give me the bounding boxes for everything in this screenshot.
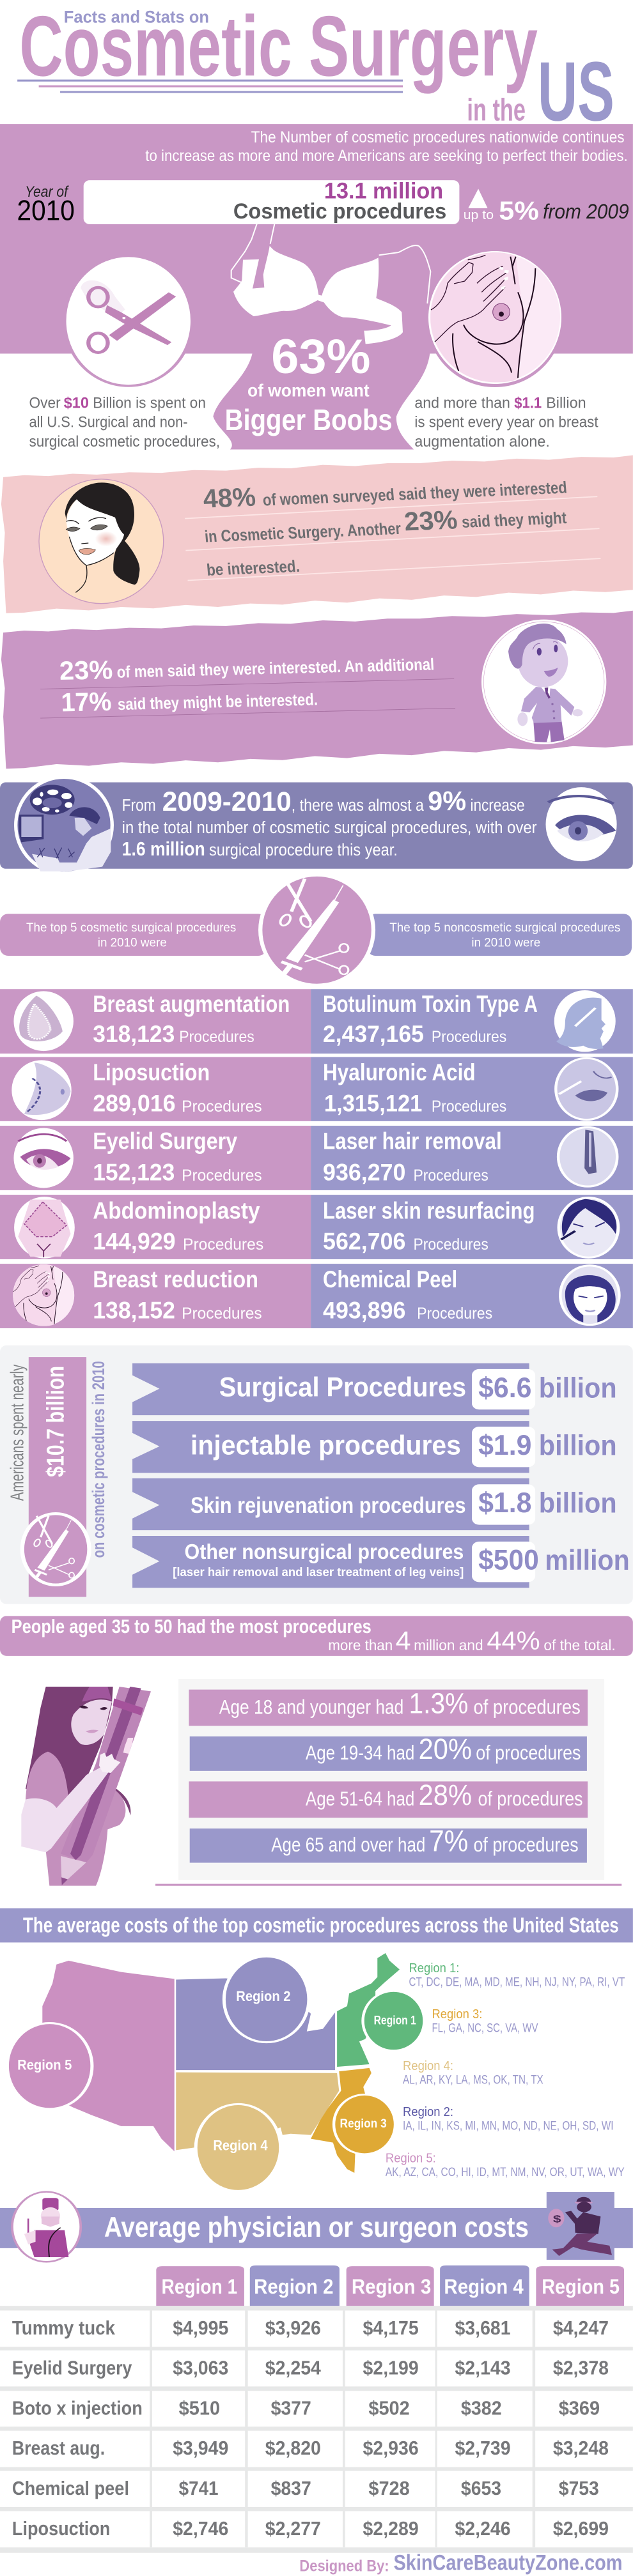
- stat: 63% of women want bigger boobs: [225, 329, 393, 437]
- table row: breast augmentation: [12, 2437, 609, 2459]
- year of 2010: Year of: [25, 183, 69, 201]
- map region 1: [337, 1953, 400, 2067]
- table row: botox injection: $502: [368, 2397, 410, 2419]
- row: hyaluronic acid: Procedures: [432, 1098, 506, 1116]
- text: 9% increase: increase: [470, 795, 525, 815]
- row: breast augmentation: [93, 990, 290, 1047]
- title underline stripes: [17, 80, 403, 93]
- table row: breast augmentation: $2,820: [265, 2437, 321, 2459]
- icon: face mask: [560, 1266, 619, 1325]
- table row: tummy tuck: $3,681: [455, 2317, 511, 2339]
- row: skin rejuvenation $1.8 billion: Skin rejuvenation procedures: [191, 1493, 466, 1518]
- icon: eye pink: [13, 1128, 74, 1188]
- table row: liposuction: $2,277: [265, 2518, 321, 2540]
- header: top 5 cosmetic surgical: [0, 914, 267, 956]
- circle: Region 3: [334, 2094, 395, 2154]
- stat: more than $1.1 billion: Billion: [546, 394, 586, 411]
- text: 9% increase: 9%: [428, 785, 466, 816]
- circle: Region 5: [7, 2023, 92, 2109]
- header: top 5 noncosmetic surgical: in 2010 were: [471, 936, 540, 950]
- purple background band with centre blob: [0, 124, 633, 450]
- panel: spending breakdown: [0, 1346, 633, 1886]
- row: laser hair removal: Procedures: [413, 1167, 488, 1184]
- row: other nonsurgical $500 million: [laser hair removal and laser treatment of leg veins]: [173, 1565, 464, 1579]
- row: botulinum toxin: [323, 990, 538, 1047]
- row: eyelid surgery: [93, 1128, 262, 1185]
- bar: age 65 and over: 7%: [429, 1825, 468, 1858]
- icon: liposuction: [12, 1060, 72, 1120]
- legend: regions and states: Region 5:: [386, 2150, 436, 2165]
- bar: age 51-64: Age 51-64 had: [306, 1788, 414, 1810]
- table row: tummy tuck: $4,175: [363, 2317, 419, 2339]
- row: laser skin resurfacing: 562,706: [323, 1227, 405, 1254]
- row: surgical procedures $6.6 billion: Surgical Procedures: [219, 1372, 466, 1403]
- icon: syringe and scissors badge: [260, 875, 373, 985]
- table row: eyelid surgery: $2,254: [265, 2357, 321, 2379]
- header: top 5 noncosmetic surgical: [367, 914, 632, 956]
- table row: tummy tuck: $4,995: [173, 2317, 228, 2339]
- icon: breast small: [13, 1264, 74, 1326]
- row: abdominoplasty: [93, 1197, 263, 1254]
- row: other nonsurgical $500 million: Other nonsurgical procedures: [185, 1540, 464, 1564]
- text: 23% of men: said they might be interested.: [117, 690, 318, 714]
- table row: liposuction: $2,746: [173, 2518, 228, 2540]
- icon: breast illustration: [426, 250, 563, 387]
- banner: people aged 35 to 50: more than: [328, 1637, 393, 1654]
- map region 3: [311, 2068, 371, 2173]
- stat: up 5% from 2009: up to: [464, 208, 494, 222]
- stat: 63% of women want bigger boobs: Bigger Boobs: [225, 404, 393, 437]
- text: 23% of men: [40, 655, 455, 718]
- table row: eyelid surgery: $2,143: [455, 2357, 511, 2379]
- row: injectable procedures $1.9 billion: $1.9: [478, 1429, 531, 1461]
- table row: eyelid surgery: [12, 2357, 609, 2379]
- bar: age 51-64: [189, 1779, 588, 1818]
- text: 48% of women surveyed: be interested.: [206, 556, 301, 579]
- row: hyaluronic acid: [323, 1059, 506, 1116]
- icon: eye: [546, 787, 617, 861]
- row: eyelid surgery: Procedures: [182, 1167, 262, 1184]
- stat: over $10 billion: all U.S. Surgical and non-: [29, 413, 188, 431]
- legend: regions and states: Region 4:: [403, 2058, 453, 2073]
- table row: botox injection: [12, 2397, 600, 2419]
- bar: age 65 and over: Age 65 and over had: [271, 1834, 425, 1857]
- text: 9% increase: , there was almost a: [292, 795, 424, 815]
- text: 9% increase: 1.6 million: [122, 838, 205, 860]
- icon: woman with laser: [559, 1198, 618, 1257]
- table row: botox injection: $510: [179, 2397, 220, 2419]
- row: chemical peel: Procedures: [417, 1305, 492, 1322]
- circle: Region 2: Region 2: [236, 1989, 291, 2004]
- bar: age 18 and younger: 1.3%: [409, 1687, 468, 1719]
- panel: physician costs table: [0, 2192, 633, 2575]
- footer credit: [299, 2551, 622, 2575]
- table row: breast augmentation: $2,739: [455, 2437, 511, 2459]
- text: 9% increase: From: [122, 795, 156, 815]
- row: other nonsurgical $500 million: [132, 1536, 630, 1588]
- legend: regions and states: [386, 1960, 625, 2179]
- icon: running robber with money bag: [547, 2192, 614, 2260]
- icon: abdomen: [14, 1197, 75, 1259]
- table row: tummy tuck: Tummy tuck: [12, 2317, 115, 2339]
- row: laser hair removal: Laser hair removal: [323, 1128, 502, 1154]
- map: US regions: [7, 1953, 424, 2191]
- text: 23% of men: 17%: [61, 686, 112, 717]
- table row: chemical peel: $753: [559, 2478, 599, 2499]
- row: liposuction: Liposuction: [93, 1059, 210, 1085]
- footer credit: Designed By:: [299, 2557, 389, 2575]
- row: chemical peel: [323, 1266, 492, 1324]
- bar: age 19-34: Age 19-34 had: [306, 1742, 414, 1764]
- row: injectable procedures $1.9 billion: injectable procedures: [191, 1430, 461, 1460]
- row: laser skin resurfacing: [323, 1197, 535, 1254]
- map region 5: [24, 1961, 175, 2151]
- row: abdominoplasty: Procedures: [183, 1236, 263, 1254]
- icon: head with injection: [554, 990, 616, 1052]
- row: eyelid surgery: 152,123: [93, 1158, 175, 1185]
- text: 23% of men: 23%: [59, 655, 113, 686]
- table row: botox injection: $382: [461, 2397, 502, 2419]
- table row: botox injection: $369: [559, 2397, 600, 2419]
- title block: [17, 0, 614, 139]
- row: breast augmentation: Procedures: [179, 1028, 254, 1046]
- bar: age 19-34: 20%: [419, 1733, 472, 1765]
- panel: age groups: [178, 1679, 604, 1880]
- legend: regions and states: Region 2:: [403, 2104, 453, 2119]
- row: laser hair removal: [323, 1128, 502, 1185]
- vertical text: Americans spent nearly: Americans spent nearly: [7, 1364, 28, 1501]
- row: skin rejuvenation $1.8 billion: $1.8: [478, 1487, 531, 1519]
- bar: age 18 and younger: [189, 1687, 588, 1726]
- table row: liposuction: $2,289: [363, 2518, 419, 2540]
- icon: cartoon man: [481, 620, 606, 744]
- row: hyaluronic acid: Hyaluronic Acid: [323, 1059, 476, 1085]
- text: 23% of men: of men said they were interested. An additional: [116, 655, 435, 681]
- panel: top 5 procedures: [0, 875, 633, 1328]
- header: Region 1: [156, 2266, 244, 2306]
- torn purple band: [1, 611, 633, 769]
- pink side bar: [29, 1357, 86, 1597]
- icon: operating room scene: [16, 777, 112, 873]
- table row: chemical peel: [12, 2478, 599, 2499]
- table row: chemical peel: Chemical peel: [12, 2478, 129, 2499]
- banner: people aged 35 to 50: People aged 35 to 50 had the most procedures: [12, 1615, 371, 1637]
- circle: Region 3: Region 3: [340, 2116, 387, 2130]
- year of 2010: [17, 183, 75, 226]
- icon: lips injection: [556, 1058, 617, 1120]
- panel: regional costs map: [0, 1908, 633, 2191]
- icon: tools badge: [22, 1514, 90, 1585]
- row: surgical procedures $6.6 billion: [132, 1363, 617, 1415]
- icon: laser device: [558, 1127, 617, 1186]
- blue banner: [0, 783, 633, 869]
- table row: botox injection: $377: [271, 2397, 311, 2419]
- text: 48% of women surveyed: [185, 478, 600, 580]
- text: 9% increase: 2009-2010: [162, 786, 292, 817]
- banner: people aged 35 to 50: 44%: [487, 1626, 540, 1655]
- header: Region 5: [536, 2266, 624, 2306]
- table row: liposuction: $2,246: [455, 2518, 511, 2540]
- text: 9% increase: [122, 785, 537, 860]
- table row: eyelid surgery: $2,199: [363, 2357, 419, 2379]
- banner: people aged 35 to 50: [0, 1615, 633, 1656]
- row: abdominoplasty: Abdominoplasty: [93, 1197, 260, 1224]
- circle: Region 4: Region 4: [213, 2138, 268, 2154]
- stat: more than $1.1 billion: and more than: [414, 394, 510, 411]
- stat: more than $1.1 billion: $1.1: [514, 394, 542, 411]
- row: breast augmentation: Breast augmentation: [93, 990, 290, 1017]
- row: breast reduction: [93, 1266, 262, 1324]
- text: 48% of women surveyed: in Cosmetic Surgery. Another: [204, 519, 402, 546]
- row: skin rejuvenation $1.8 billion: [132, 1478, 617, 1530]
- header: Region 1: Region 1: [162, 2275, 237, 2298]
- stat: over $10 billion: [29, 394, 220, 450]
- header: Region 2: Region 2: [254, 2275, 333, 2298]
- bar: age 19-34: [190, 1733, 587, 1771]
- row: hyaluronic acid: 1,315,121: [324, 1089, 422, 1116]
- circle: Region 1: [363, 1991, 424, 2051]
- stat: up 5% from 2009: 5%: [499, 195, 539, 226]
- circle: Region 4: [196, 2104, 281, 2191]
- header: top 5 cosmetic surgical: The top 5 cosmetic surgical procedures: [26, 921, 236, 935]
- grey background: [0, 1346, 633, 1604]
- year of 2010: 2010: [17, 195, 75, 226]
- subtitle: Facts and Stats on: Facts and Stats on: [64, 7, 209, 26]
- stat: more than $1.1 billion: augmentation alone.: [414, 433, 550, 450]
- row: laser hair removal: 936,270: [323, 1158, 405, 1185]
- row: breast reduction: Breast reduction: [93, 1266, 258, 1292]
- banner: people aged 35 to 50: 4: [396, 1626, 411, 1655]
- bar: age 51-64: 28%: [419, 1779, 472, 1811]
- header: Region 4: Region 4: [444, 2275, 524, 2298]
- stat: 13.1 million cosmetic procedures: [84, 179, 459, 224]
- bar: age 65 and over: [190, 1825, 587, 1863]
- table row: eyelid surgery: $3,063: [173, 2357, 228, 2379]
- vertical text: on cosmetic procedures in 2010: on cosmetic procedures in 2010: [89, 1361, 108, 1558]
- table headers: [156, 2266, 624, 2306]
- heading banner: [0, 2208, 633, 2248]
- text: 48% of women surveyed: 48%: [202, 482, 256, 514]
- table row: breast augmentation: Breast aug.: [12, 2437, 105, 2459]
- header: Region 4: [440, 2266, 529, 2306]
- panel: women interested: [1, 455, 633, 613]
- row: breast reduction: Procedures: [182, 1305, 262, 1322]
- map region 2: [176, 1979, 335, 2070]
- row: abdominoplasty: 144,929: [93, 1227, 176, 1254]
- icon: bra: [231, 224, 430, 344]
- text: 48% of women surveyed: 23%: [403, 505, 458, 536]
- table row: breast augmentation: $3,949: [173, 2437, 228, 2459]
- stat: over $10 billion: Billion is spent on: [93, 394, 206, 411]
- header: top 5 cosmetic surgical: in 2010 were: [98, 936, 167, 950]
- panel: 2009-2010 increase: [0, 783, 633, 869]
- panel: men interested: [1, 611, 633, 769]
- title block: in the: [467, 92, 526, 127]
- legend: regions and states: Region 1:: [409, 1960, 459, 1975]
- table row: eyelid surgery: Eyelid Surgery: [12, 2357, 132, 2379]
- stat: 63% of women want bigger boobs: 63%: [271, 329, 371, 383]
- bar: age 18 and younger: Age 18 and younger had: [219, 1696, 403, 1719]
- icon: woman face: [39, 479, 164, 604]
- row: botulinum toxin: Procedures: [432, 1028, 506, 1046]
- vertical text: $10.7 billion: $10.7 billion: [42, 1366, 69, 1477]
- row: chemical peel: 493,896: [323, 1296, 405, 1324]
- table row: chemical peel: $728: [368, 2478, 410, 2499]
- panel: 2010 overview: [0, 124, 633, 450]
- table row: liposuction: [12, 2518, 609, 2540]
- header: Region 2: [250, 2266, 340, 2306]
- stat: 63% of women want bigger boobs: of women want: [247, 381, 370, 401]
- stat: more than $1.1 billion: [414, 394, 598, 450]
- torn pink band: [1, 455, 633, 613]
- icon: implant: [13, 991, 74, 1051]
- left procedure rows: [0, 989, 311, 1328]
- row: laser skin resurfacing: Procedures: [413, 1236, 488, 1254]
- row: eyelid surgery: Eyelid Surgery: [93, 1128, 237, 1154]
- table row: tummy tuck: $3,926: [265, 2317, 321, 2339]
- circle: Region 5: Region 5: [17, 2057, 72, 2073]
- table row: chemical peel: $837: [271, 2478, 311, 2499]
- map region 4: [176, 2073, 339, 2150]
- table row: botox injection: Boto x injection: [12, 2397, 143, 2419]
- banner: people aged 35 to 50: million and: [414, 1637, 483, 1654]
- icon: running robber with money bag: $: [553, 2214, 561, 2225]
- row: breast reduction: 138,152: [93, 1296, 175, 1324]
- stat: over $10 billion: $10: [64, 394, 89, 411]
- heading banner: [0, 1908, 633, 1942]
- stat: over $10 billion: Over: [29, 394, 61, 411]
- stat: over $10 billion: surgical cosmetic procedures,: [29, 433, 220, 450]
- row: liposuction: Procedures: [182, 1098, 262, 1116]
- stat: 13.1 million cosmetic procedures: Cosmetic procedures: [233, 199, 446, 223]
- right procedure rows: [311, 989, 633, 1328]
- circle: Region 1: Region 1: [374, 2014, 416, 2027]
- row: liposuction: [93, 1059, 262, 1116]
- row: liposuction: 289,016: [93, 1089, 176, 1116]
- text: 9% increase: surgical procedure this year.: [209, 841, 398, 859]
- header: Region 3: [347, 2266, 434, 2306]
- table row: chemical peel: $741: [179, 2478, 219, 2499]
- icon: surgeon: [12, 2192, 81, 2262]
- row: injectable procedures $1.9 billion: [132, 1421, 617, 1473]
- legend: regions and states: Region 3:: [432, 2006, 482, 2021]
- table row: breast augmentation: $2,936: [363, 2437, 419, 2459]
- stat: up 5% from 2009: [464, 189, 629, 226]
- row: breast augmentation: 318,123: [93, 1020, 175, 1047]
- stat: 13.1 million cosmetic procedures: 13.1 million: [324, 179, 443, 204]
- row: botulinum toxin: 2,437,165: [323, 1020, 424, 1047]
- intro text: [145, 128, 628, 165]
- illustration: girl with pencil: [21, 1687, 151, 1886]
- header: Region 3: Region 3: [352, 2275, 431, 2298]
- table row: chemical peel: $653: [461, 2478, 501, 2499]
- table row: liposuction: Liposuction: [12, 2518, 110, 2540]
- row: chemical peel: Chemical Peel: [323, 1266, 457, 1292]
- icon: scissors: [65, 256, 192, 386]
- row: other nonsurgical $500 million: $500: [478, 1544, 539, 1575]
- text: 48% of women surveyed: said they might: [461, 508, 567, 532]
- circle: Region 2: [224, 1956, 309, 2043]
- table row: tummy tuck: [12, 2317, 609, 2339]
- row: surgical procedures $6.6 billion: $6.6: [478, 1372, 531, 1404]
